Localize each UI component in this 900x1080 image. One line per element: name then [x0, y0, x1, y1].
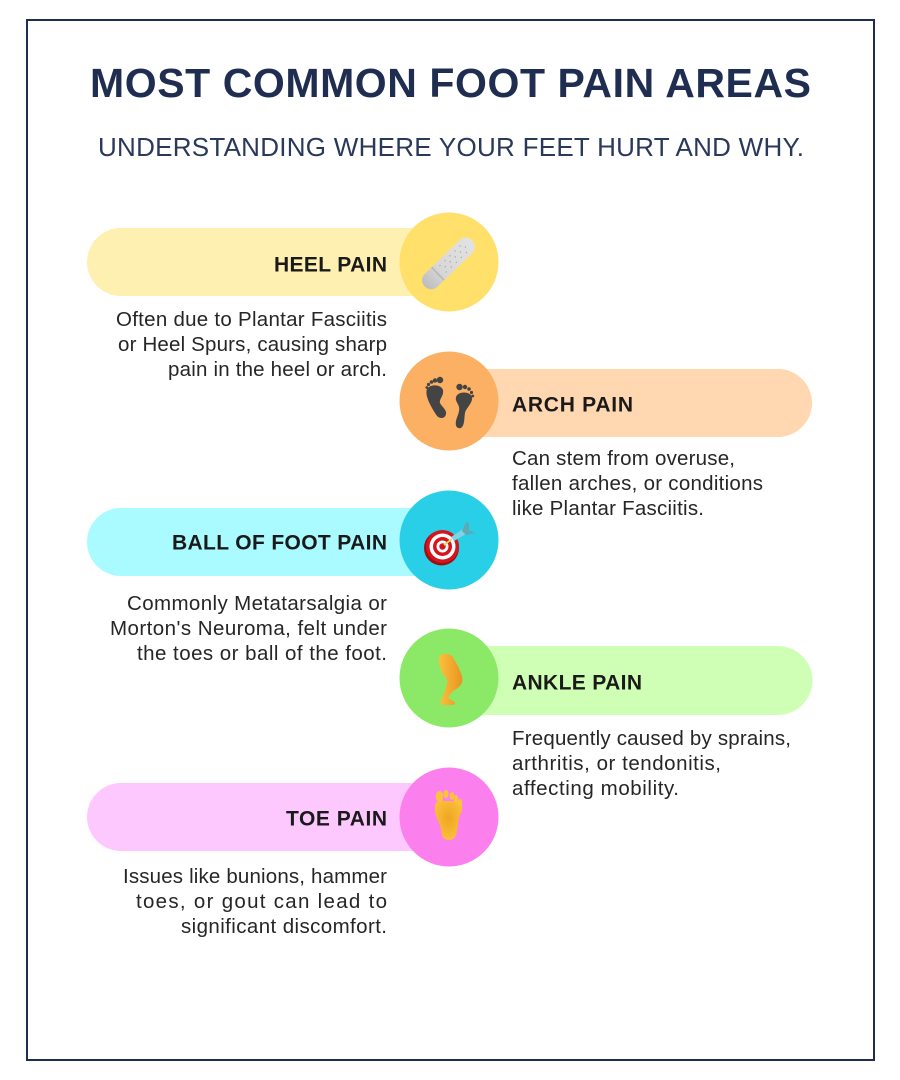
- panel: toe pain: [87, 768, 498, 938]
- arch pain pill: [460, 369, 812, 437]
- heel pain description: Often due to Plantar Fasciitis: [116, 308, 387, 331]
- toe pain description: significant discomfort.: [181, 915, 387, 938]
- heel pain description: pain in the heel or arch.: [168, 358, 387, 381]
- subtitle: UNDERSTANDING WHERE YOUR FEET HURT AND WHY.: [98, 132, 804, 162]
- arch pain description: fallen arches, or conditions: [512, 472, 763, 495]
- arch pain description: like Plantar Fasciitis.: [512, 497, 704, 520]
- toe pain description: toes, or gout can lead to: [136, 890, 387, 913]
- toe pain description: [123, 865, 387, 938]
- ankle pain description: [512, 727, 791, 800]
- heel pain heading: HEEL PAIN: [274, 254, 387, 276]
- ankle pain icon: leg: [400, 628, 498, 728]
- heel pain pill: [87, 228, 440, 296]
- toe pain heading: TOE PAIN: [286, 808, 387, 830]
- ball of foot description: [110, 592, 387, 665]
- ball of foot icon: target and dart: [400, 490, 498, 590]
- ball of foot description: the toes or ball of the foot.: [137, 642, 387, 665]
- ball of foot heading: BALL OF FOOT PAIN: [172, 532, 387, 554]
- arch pain heading: ARCH PAIN: [512, 394, 633, 416]
- ball of foot description: Morton's Neuroma, felt under: [110, 617, 387, 640]
- heel pain icon: bandage: [400, 212, 498, 312]
- heel pain description: or Heel Spurs, causing sharp: [118, 333, 387, 356]
- ankle pain description: affecting mobility.: [512, 777, 679, 800]
- toe pain icon: foot: [400, 768, 498, 866]
- panel: arch pain: [400, 352, 812, 520]
- ankle pain heading: ANKLE PAIN: [512, 672, 642, 694]
- arch pain description: [512, 447, 763, 520]
- panel: heel pain: [87, 212, 499, 381]
- arch pain description: Can stem from overuse,: [512, 447, 735, 470]
- ball of foot pill: [87, 508, 440, 576]
- panel: ball of foot pain: [87, 490, 498, 665]
- ankle pain description: arthritis, or tendonitis,: [512, 752, 721, 775]
- toe pain description: Issues like bunions, hammer: [123, 865, 387, 888]
- heel pain description: [116, 308, 387, 381]
- ankle pain pill: [460, 646, 813, 715]
- arch pain icon: footprints: [400, 352, 498, 450]
- ankle pain description: Frequently caused by sprains,: [512, 727, 791, 750]
- ball of foot description: Commonly Metatarsalgia or: [127, 592, 387, 615]
- panel: ankle pain: [400, 628, 813, 800]
- title: MOST COMMON FOOT PAIN AREAS: [90, 60, 811, 106]
- toe pain pill: [87, 783, 440, 851]
